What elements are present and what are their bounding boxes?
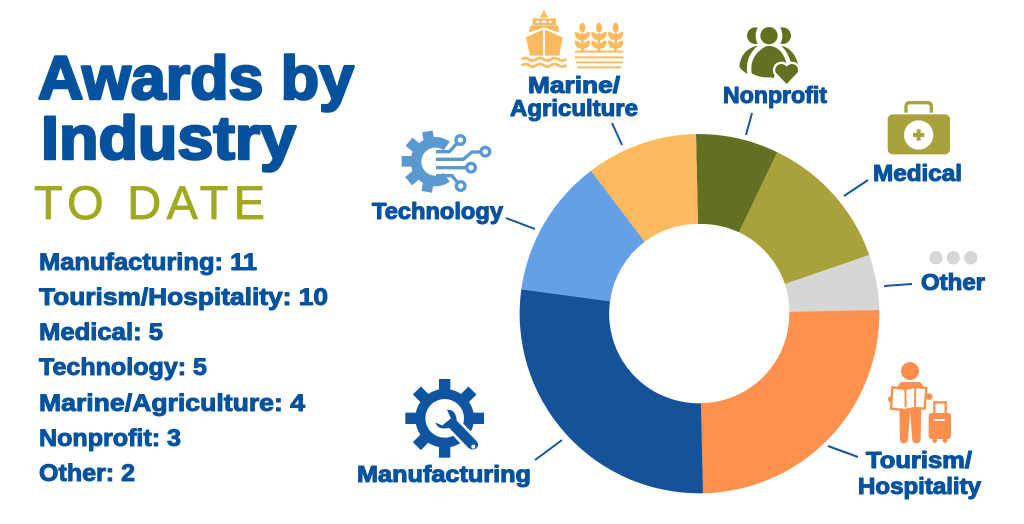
label: other: Other [921, 269, 985, 295]
segment: marine and agriculture [591, 134, 698, 242]
title: Awards by [38, 44, 354, 112]
award counts list: Medical: 5 [39, 319, 163, 346]
segment: medical [739, 152, 869, 284]
label: medical: Medical [873, 160, 962, 186]
segment: manufacturing [520, 289, 703, 493]
award counts list: Marine/Agriculture: 4 [39, 390, 306, 417]
icon: traveler with map and suitcase [888, 362, 951, 443]
icon: other dots [929, 251, 977, 264]
title: Industry [41, 104, 296, 172]
segment: technology [521, 171, 645, 301]
subtitle: to date: TO DATE [34, 176, 265, 229]
award counts list [39, 249, 328, 487]
award counts list: Technology: 5 [39, 354, 207, 381]
award counts list: Nonprofit: 3 [39, 425, 181, 452]
label: marine and agriculture [510, 72, 638, 121]
label: marine and agriculture: Agriculture [510, 95, 638, 121]
label: nonprofit: Nonprofit [723, 82, 827, 108]
icon: wrench in gear [405, 379, 484, 458]
award counts list: Tourism/Hospitality: 10 [39, 284, 328, 311]
title [38, 44, 354, 172]
segment: nonprofit [696, 134, 777, 232]
icon: gear with circuit lines [402, 130, 490, 193]
award counts list: Other: 2 [39, 460, 135, 487]
segment: other [785, 255, 879, 312]
leader lines [506, 113, 912, 460]
donut chart [520, 134, 879, 493]
label: marine and agriculture: Marine/ [528, 72, 621, 98]
label: manufacturing: Manufacturing [357, 461, 531, 487]
award counts list: Manufacturing: 11 [39, 249, 257, 276]
label: tourism and hospitality: Tourism/ [866, 447, 973, 473]
icon: nonprofit people with heart [739, 27, 799, 86]
label: tourism and hospitality: Hospitality [858, 473, 981, 499]
label: technology: Technology [372, 198, 503, 224]
icon: ship and wheat [522, 9, 623, 68]
segment: tourism and hospitality [701, 310, 879, 493]
icon: medical bag [888, 103, 950, 154]
label: tourism and hospitality [858, 447, 981, 499]
